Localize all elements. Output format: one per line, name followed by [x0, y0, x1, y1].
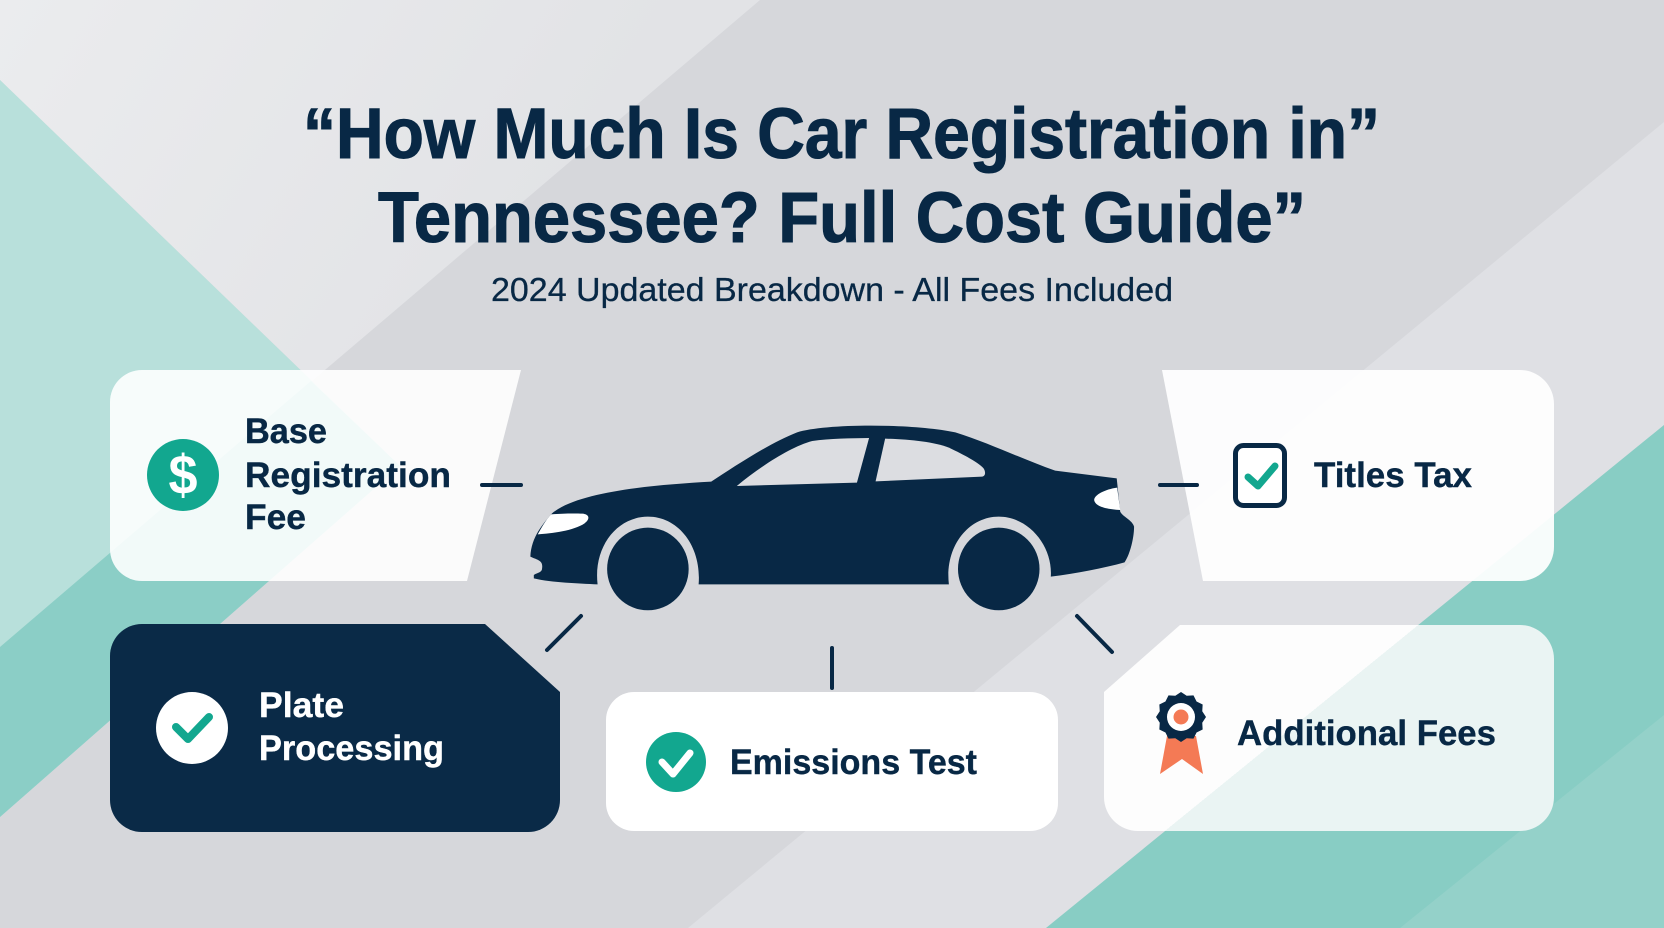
title: [303, 95, 1380, 258]
label: plate processing: [259, 686, 444, 768]
label: plate processing: Processing: [259, 729, 444, 768]
icon: checkbox: [1236, 446, 1284, 506]
panel: additional fees: [1104, 625, 1554, 831]
label: plate processing: Plate: [259, 686, 344, 725]
icon: dollar coin: $: [168, 443, 198, 506]
subtitle: 2024 Updated Breakdown - All Fees Included: [491, 271, 1173, 308]
label: emissions test: Emissions Test: [730, 743, 977, 782]
icon: check circle: [156, 692, 228, 764]
label: titles tax: Titles Tax: [1314, 456, 1473, 495]
panel: base registration fee: [110, 370, 521, 581]
panel: plate processing: [110, 624, 560, 832]
panel: titles tax: [1162, 370, 1554, 581]
title: “How Much Is Car Registration in”: [303, 95, 1380, 174]
label: base registration fee: Registration: [245, 456, 451, 495]
car silhouette: [530, 426, 1134, 610]
icon: dollar coin: [147, 439, 219, 511]
label: base registration fee: Base: [245, 412, 327, 451]
icon: award ribbon: [1156, 692, 1206, 774]
title: Tennessee? Full Cost Guide”: [378, 179, 1306, 258]
connector lines: [482, 485, 1197, 688]
label: additional fees: Additional Fees: [1237, 714, 1496, 753]
label: base registration fee: Fee: [245, 498, 306, 537]
icon: green check circle: [646, 732, 706, 792]
label: base registration fee: [245, 412, 451, 537]
panel: emissions test: [606, 692, 1058, 831]
